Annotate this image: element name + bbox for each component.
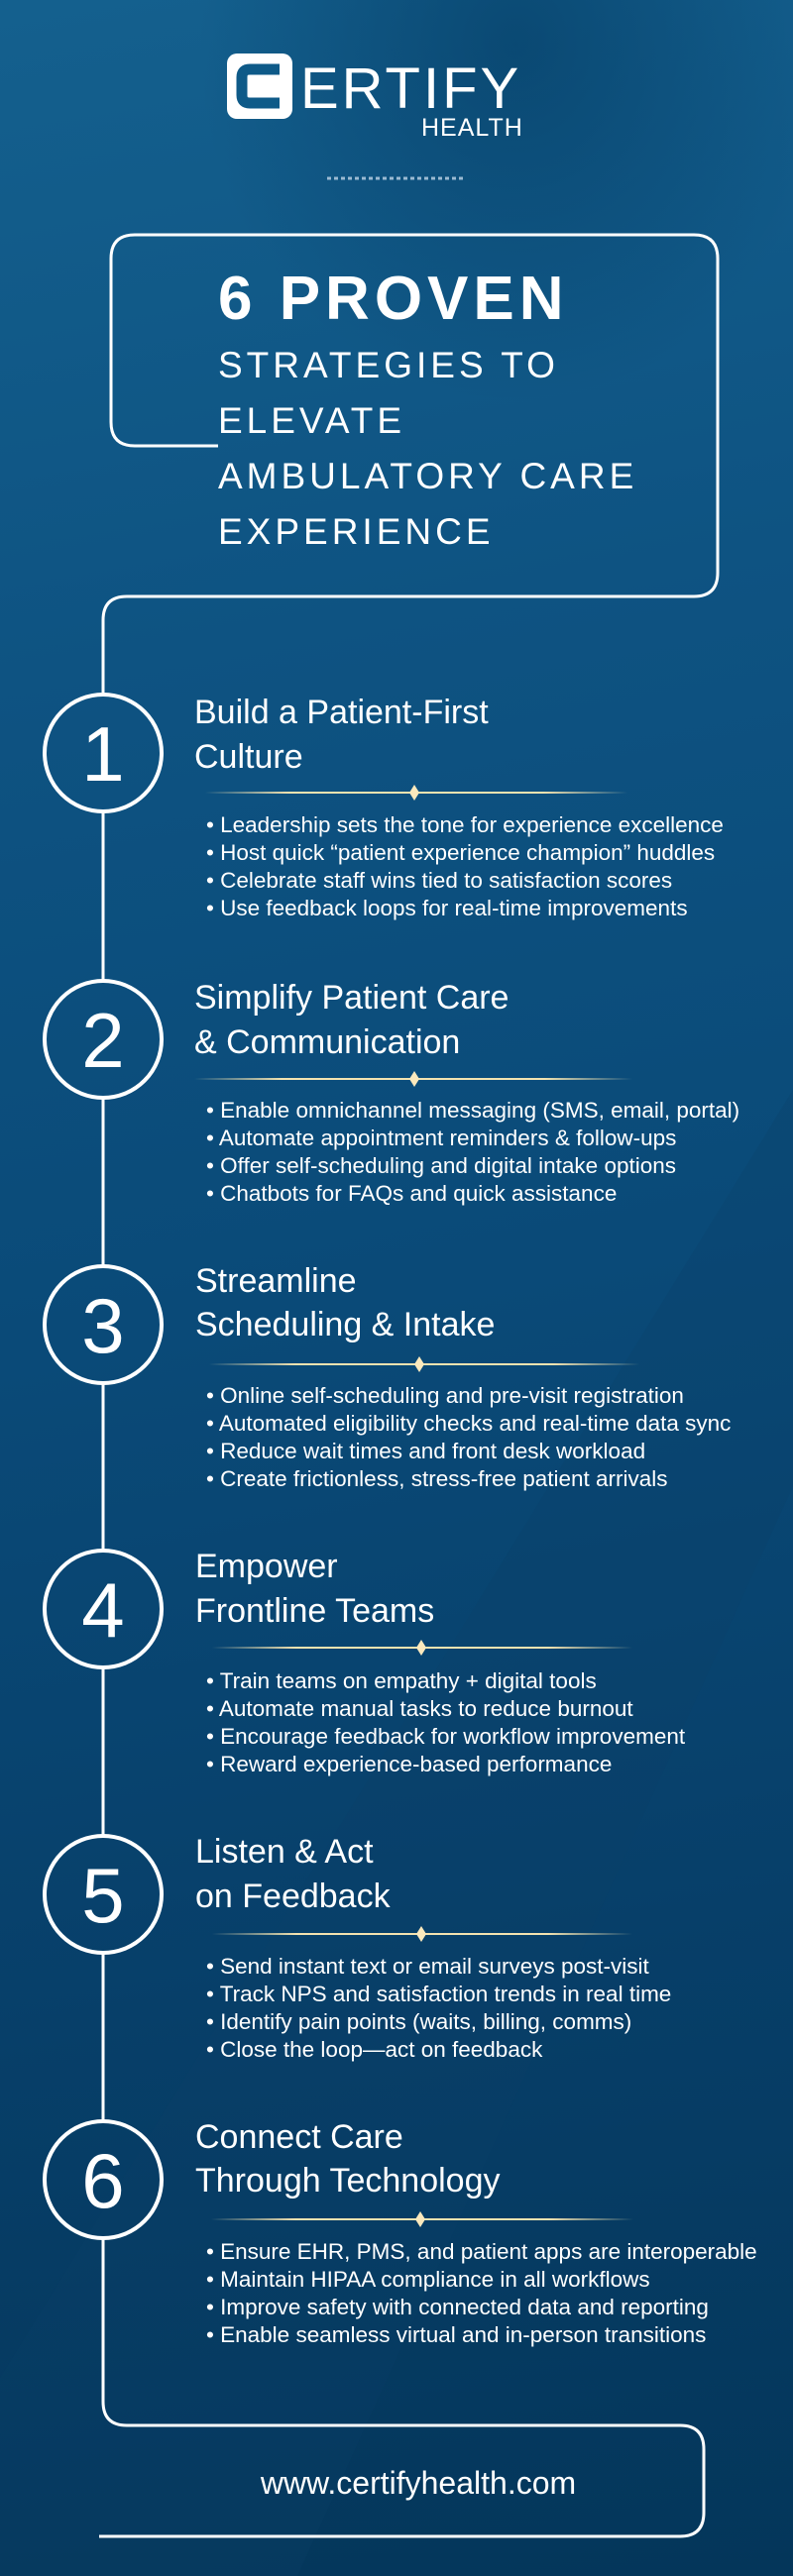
number circle 1: 1	[81, 710, 125, 798]
title: 6 PROVEN	[218, 265, 569, 333]
heading 6	[195, 2118, 500, 2200]
divider	[211, 2211, 633, 2227]
bullets 4: • Reward experience-based performance	[206, 1752, 612, 1776]
bullets 2: • Enable omnichannel messaging (SMS, email, portal)	[206, 1098, 739, 1123]
number circle 3: 3	[81, 1282, 125, 1369]
bullets 5: • Identify pain points (waits, billing, comms)	[206, 2009, 631, 2034]
heading 4: Empower	[195, 1548, 338, 1585]
logo	[227, 54, 523, 142]
bullets 1: • Celebrate staff wins tied to satisfaction scores	[206, 868, 672, 893]
divider	[209, 1356, 639, 1372]
logo: HEALTH	[421, 114, 523, 142]
bullets 6: • Improve safety with connected data and reporting	[206, 2295, 709, 2319]
section 3	[45, 1262, 731, 1491]
divider	[194, 1071, 632, 1087]
heading 4: Frontline Teams	[195, 1592, 434, 1630]
bullets 6	[206, 2239, 757, 2347]
bullets 4: • Train teams on empathy + digital tools	[206, 1668, 597, 1693]
heading 1: Culture	[194, 738, 303, 776]
heading 2: & Communication	[194, 1023, 460, 1061]
heading 1: Build a Patient-First	[194, 694, 489, 731]
title	[218, 265, 637, 552]
bullets 5: • Send instant text or email surveys post-visit	[206, 1954, 650, 1979]
bullets 2	[206, 1098, 739, 1206]
divider	[212, 1926, 632, 1942]
heading 6: Connect Care	[195, 2118, 403, 2156]
bullets 1	[206, 812, 724, 920]
bullets 4	[206, 1668, 686, 1776]
number circle 5	[45, 1836, 162, 1953]
bullets 5: • Close the loop—act on feedback	[206, 2037, 543, 2062]
title: STRATEGIES TO	[218, 345, 559, 385]
section 2	[45, 979, 739, 1206]
heading 1	[194, 694, 489, 776]
heading 2	[194, 979, 509, 1061]
section 4	[45, 1548, 686, 1776]
bullets 1: • Leadership sets the tone for experience excellence	[206, 812, 724, 837]
title: ELEVATE	[218, 400, 405, 441]
title box frame	[103, 235, 718, 693]
number circle 6: 6	[81, 2137, 125, 2224]
bullets 2: • Offer self-scheduling and digital intake options	[206, 1153, 676, 1178]
number circle 3	[45, 1266, 162, 1383]
number circle 2	[45, 981, 162, 1098]
heading 5: on Feedback	[195, 1878, 392, 1915]
divider	[212, 1640, 632, 1656]
heading 3: Scheduling & Intake	[195, 1306, 495, 1343]
bullets 4: • Encourage feedback for workflow improvement	[206, 1724, 686, 1749]
heading 2: Simplify Patient Care	[194, 979, 509, 1017]
bullets 3: • Reduce wait times and front desk workload	[206, 1439, 645, 1463]
section 6	[45, 2118, 757, 2347]
bullets 6: • Enable seamless virtual and in-person transitions	[206, 2322, 706, 2347]
number circle 4	[45, 1551, 162, 1667]
number circle 6	[45, 2121, 162, 2238]
heading 5	[195, 1833, 392, 1915]
heading 6: Through Technology	[195, 2162, 500, 2200]
heading 3	[195, 1262, 495, 1343]
bullets 5: • Track NPS and satisfaction trends in real time	[206, 1982, 671, 2006]
bullets 3: • Automated eligibility checks and real-time data sync	[206, 1411, 731, 1436]
bullets 3: • Create frictionless, stress-free patient arrivals	[206, 1466, 668, 1491]
bullets 6: • Ensure EHR, PMS, and patient apps are interoperable	[206, 2239, 757, 2264]
title: EXPERIENCE	[218, 511, 495, 552]
bullets 4: • Automate manual tasks to reduce burnout	[206, 1696, 633, 1721]
number circle 5: 5	[81, 1852, 125, 1939]
number circle 4: 4	[81, 1566, 125, 1654]
bullets 2: • Chatbots for FAQs and quick assistance	[206, 1181, 617, 1206]
website url: www.certifyhealth.com	[260, 2465, 576, 2501]
bullets 3	[206, 1383, 731, 1491]
bullets 5	[206, 1954, 671, 2062]
logo: ERTIFY	[300, 56, 521, 121]
section 5	[45, 1833, 671, 2062]
section 1	[45, 694, 724, 920]
number circle 2: 2	[81, 997, 125, 1084]
bullets 2: • Automate appointment reminders & follow-ups	[206, 1126, 676, 1150]
timeline connectors	[99, 811, 704, 2536]
bullets 3: • Online self-scheduling and pre-visit registration	[206, 1383, 684, 1408]
number circle 1	[45, 695, 162, 811]
bullets 1: • Host quick “patient experience champion” huddles	[206, 840, 715, 865]
bullets 6: • Maintain HIPAA compliance in all workflows	[206, 2267, 650, 2292]
divider	[205, 785, 627, 801]
bullets 1: • Use feedback loops for real-time improvements	[206, 896, 688, 920]
heading 3: Streamline	[195, 1262, 357, 1300]
heading 5: Listen & Act	[195, 1833, 374, 1871]
title: AMBULATORY CARE	[218, 456, 637, 496]
heading 4	[195, 1548, 434, 1630]
